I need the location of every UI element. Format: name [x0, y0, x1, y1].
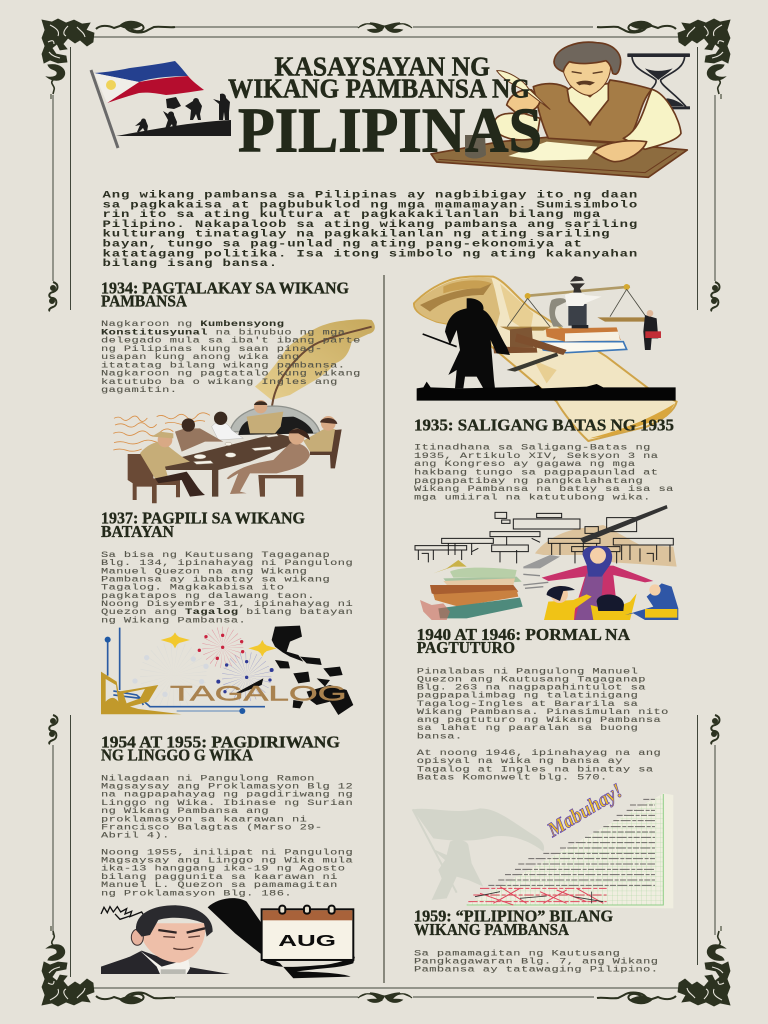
illustration: man writing at a desk: [431, 42, 687, 177]
text: 1934 body: Konstitusyunal na binubuo ng mga: [101, 328, 345, 338]
text: 1934 body: [101, 319, 361, 395]
text: 1959 body: Pambansa ay tatawaging Pilipino.: [414, 965, 658, 975]
text: 1935 body: pagpapatibay ng pangkalahatang: [414, 476, 643, 486]
icon: soldiers silhouette on a hill: [116, 94, 231, 136]
text: 1937 body: Manuel Quezon na ang Wikang: [101, 567, 307, 577]
text: 1959 body: Pangkagawaran Blg. 7, ang Wikang: [414, 957, 658, 967]
text: 1940 body: ang pagtuturo ng Wikang Pambansa: [417, 716, 661, 725]
text: 1937 body: Quezon ang Tagalog bilang batayan: [101, 608, 353, 617]
text: 1937 body: ng Wikang Pambansa.: [101, 616, 246, 626]
text: 1935 body: hakbang tungo sa pagpapaunlad at: [414, 468, 658, 478]
text: 1954 body: Abril 4).: [101, 831, 170, 841]
text: 1937 body: Noong Disyembre 31, ipinahayag ni: [101, 599, 353, 609]
text: 1954 body: Noong 1955, inilipat ni Pangulong: [101, 848, 353, 858]
intro paragraph: bayan, tungo sa pag-unlad ng ating pang-ekonomiya at: [102, 238, 583, 250]
heading: 1934: [101, 278, 349, 311]
heading: 1937: BATAYAN: [101, 522, 174, 541]
heading: 1940 at 1946: PAGTUTURO: [417, 638, 515, 657]
text: 1934 body: Nagkaroon ng Kumbensyong: [101, 319, 284, 329]
text: 1954 body: na nagpapahayag ng pagdiriwang ng: [101, 790, 353, 800]
text: 1959 body: Sa pamamagitan ng Kautusang: [414, 949, 620, 959]
text: 1934 body: usapan kung anong wika ang: [101, 352, 300, 362]
heading: 1954 at 1955: [101, 732, 340, 765]
heading: 1940 at 1946: 1940 AT 1946: PORMAL NA: [417, 625, 630, 644]
text: 1954 body: Magsaysay ang Linggo ng Wika mula: [101, 856, 353, 866]
text: 1934 body: delegado mula sa iba't ibang parte: [101, 336, 361, 346]
title: WIKANG PAMBANSA NG: [228, 74, 530, 104]
text: 1937 body: Blg. 134, ipinahayag ni Pangulong: [101, 559, 353, 568]
text: 1935 body: ang Kongreso ay gagawa ng mga: [414, 460, 636, 469]
text: 1954 body: Magsaysay ang Proklamasyon Blg 12: [101, 782, 353, 792]
center divider: [383, 275, 385, 983]
text: 1954 body: ng Proklamasyon Blg. 186.: [101, 889, 292, 899]
title: [228, 52, 542, 166]
text: 1937 body: Sa bisa ng Kautusang Tagaganap: [101, 550, 330, 560]
text: 1940 body: Blg. 263 na nagpapahintulot sa: [417, 683, 646, 693]
text: 1937 body: Pambansa ay ibabatay sa wikang: [101, 575, 330, 585]
text: 1935 body: mga umiiral na katutubong wika.: [414, 493, 651, 503]
text: 1940 body: opisyal na wika ng bansa ay: [417, 757, 623, 766]
intro paragraph: Ang wikang pambansa sa Pilipinas ay nagbibigay ito ng daan: [102, 189, 638, 201]
text: 1934 body: Nagkaroon ng pagtatalo kung wikang: [101, 369, 361, 379]
title: KASAYSAYAN NG: [274, 52, 490, 82]
intro paragraph: katatagang politika. Isa itong simbolo ng ating kakanyahan: [102, 248, 638, 260]
text: 1940 body: [417, 667, 669, 783]
intro paragraph: sa pagkakaisa at pagbubuklod ng mga mamamayan. Sumisimbolo: [102, 199, 638, 211]
text: 1959 body: [414, 949, 658, 975]
text: 1937 body: pagkatapos ng dalawang taon.: [101, 591, 315, 601]
text: 1940 body: Wikang Pambansa. Pinasimulan nito: [417, 707, 669, 717]
heading: 1959: [414, 907, 613, 939]
text: 1954 body: Francisco Balagtas (Marso 29-: [101, 823, 323, 833]
text: 1940 body: Tagalog at Ingles na binatay sa: [417, 765, 654, 775]
illustration: classroom, books, teacher and pupils: [415, 505, 678, 620]
illustration: Tagalog with fireworks and map: [101, 626, 353, 715]
text: 1954 body: Manuel L. Quezon sa pamamagitan: [101, 881, 338, 890]
heading: 1934: 1934: PAGTALAKAY SA WIKANG: [101, 278, 349, 297]
illustration: scroll with scales of justice: [414, 276, 677, 441]
intro paragraph: bilang isang bansa.: [102, 258, 278, 269]
text: 1934 body: itatatag bilang wikang pambansa.: [101, 361, 345, 371]
text: 1940 body: sa lahat ng paaralan sa buong: [417, 724, 638, 733]
text: 1954 body: ng Wikang Pambansa ang: [101, 807, 269, 816]
text: 1940 body: Batas Komonwelt blg. 570.: [417, 773, 608, 783]
heading: 1940 at 1946: [417, 625, 630, 657]
intro paragraph: kulturang tinataglay na pagkakilanlan ng ating sariling: [102, 228, 610, 240]
icon: Philippine flag: [91, 61, 204, 148]
intro paragraph: rin ito sa ating kultura at pagkakakilanlan bilang mga: [102, 209, 601, 220]
heading: 1954 at 1955: NG LINGGO G WIKA: [101, 746, 253, 765]
text: 1935 body: Itinadhana sa Saligang-Batas ng: [414, 443, 651, 453]
icon: pen nib and August calendar: AUG: [278, 933, 336, 950]
text: 1940 body: At noong 1946, ipinahayag na ang: [417, 748, 661, 758]
text: 1937 body: [101, 550, 353, 626]
text: 1940 body: Pinalabas ni Pangulong Manuel: [417, 667, 638, 677]
illustration: Mabuhay page with flag bearer: Mabuhay!: [543, 780, 627, 842]
text: 1937 body: Tagalog. Magkakabisa ito: [101, 583, 284, 593]
text: 1954 body: Nilagdaan ni Pangulong Ramon: [101, 774, 315, 784]
text: 1954 body: Linggo ng Wika. Ibinase ng Surian: [101, 798, 353, 808]
text: 1954 body: ika-13 hanggang ika-19 ng Agosto: [101, 864, 345, 874]
heading: 1954 at 1955: 1954 AT 1955: PAGDIRIWANG: [101, 732, 340, 751]
title: PILIPINAS: [238, 95, 542, 166]
heading: 1937: 1937: PAGPILI SA WIKANG: [101, 508, 305, 527]
icon: pen nib and August calendar: [208, 898, 355, 978]
text: 1934 body: gagamitin.: [101, 385, 177, 395]
text: 1940 body: Tagalog-Ingles at Bararila sa: [417, 699, 638, 709]
text: 1935 body: [414, 443, 674, 503]
text: 1954 body: proklamasyon sa kaarawan ni: [101, 815, 307, 825]
text: 1940 body: bansa.: [417, 732, 463, 742]
text: 1940 body: pagpapalimbag ng talatinigang: [417, 691, 638, 701]
illustration: Tagalog with fireworks and map: TAGALOG: [170, 682, 347, 706]
text: 1954 body: [101, 774, 353, 899]
heading: 1959: 1959: “PILIPINO” BILANG: [414, 907, 613, 926]
illustration: Quezon portrait with signature: [101, 905, 230, 974]
text: 1934 body: katutubo ba o wikang Ingles ang: [101, 377, 338, 387]
heading: 1934: PAMBANSA: [101, 292, 187, 311]
illustration: Mabuhay page with flag bearer: [413, 780, 673, 908]
heading: 1959: WIKANG PAMBANSA: [414, 920, 569, 939]
text: 1934 body: ng Pilipinas kung saan pinag-: [101, 344, 323, 354]
icon: hourglass: [627, 53, 690, 109]
heading: 1935: 1935: SALIGANG BATAS NG 1935: [414, 416, 674, 435]
text: 1954 body: bilang paggunita sa kaarawan ni: [101, 872, 338, 882]
illustration: feather and meeting table: [113, 319, 375, 503]
intro paragraph: [102, 189, 638, 269]
text: 1940 body: Quezon ang Kautusang Tagaganap: [417, 675, 646, 685]
text: 1935 body: 1935, Artikulo XIV, Seksyon 3 na: [414, 451, 658, 461]
heading: 1937: [101, 508, 305, 541]
intro paragraph: Pilipino. Nakapaloob sa ating wikang pambansa ang sariling: [102, 219, 638, 230]
text: 1935 body: Wikang Pambansa na batay sa isa sa: [414, 484, 674, 494]
